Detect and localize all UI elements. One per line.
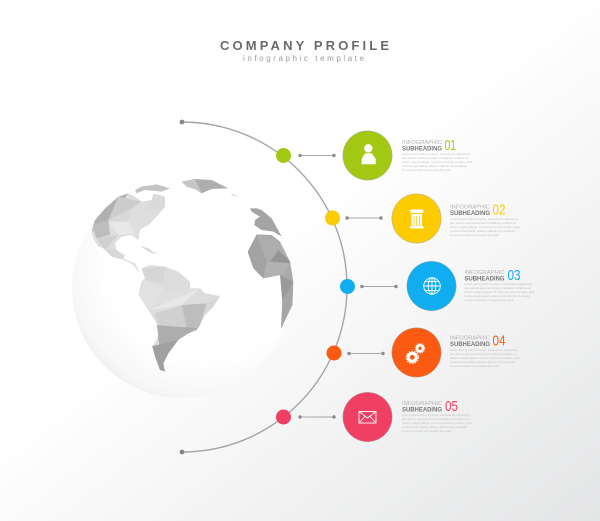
- number: 04: [492, 332, 506, 350]
- body text: [402, 413, 472, 433]
- body text: nostrud exercitation ullamco laboris nisi ut aliquip: [402, 425, 468, 429]
- item 2: SUBHEADING: [450, 211, 490, 217]
- circle: [392, 328, 441, 377]
- south america: [138, 265, 220, 372]
- arc end dots: [180, 120, 184, 454]
- circle: [343, 392, 392, 442]
- number: 01: [444, 137, 456, 154]
- number: 03: [508, 267, 520, 284]
- node dot: [340, 279, 355, 294]
- body text: ex ea commodo consequat duis aute: [450, 233, 499, 237]
- body text: nostrud exercitation ullamco laboris nisi ut aliquip: [450, 229, 516, 233]
- connector: [299, 416, 335, 418]
- body text: elit, sed do eiusmod tempor incididunt ut labore et: [402, 417, 468, 421]
- node dot: [326, 346, 342, 360]
- title: COMPANY PROFILE: [220, 38, 389, 53]
- north america: [90, 184, 170, 275]
- body text: dolore magna aliqua. Ut enim ad minim veniam, quis: [402, 160, 472, 164]
- body text: dolore magna aliqua. Ut enim ad minim veniam, quis: [464, 290, 535, 294]
- heading: INFOGRAPHIC: [402, 401, 442, 407]
- node dot: [276, 148, 291, 163]
- body text: [450, 348, 520, 368]
- body text: ex ea commodo consequat duis aute: [402, 429, 451, 433]
- item 5: [276, 392, 472, 442]
- small island: [230, 193, 238, 197]
- body text: [464, 282, 535, 302]
- body text: Lorem ipsum dolor sit amet, consectetur adipiscing: [450, 348, 518, 352]
- arc timeline: [182, 122, 347, 452]
- icon: person: [362, 144, 376, 164]
- greenland, europe, africa: [182, 179, 295, 332]
- node dot: [325, 210, 340, 226]
- number: 05: [445, 398, 458, 415]
- item 4: SUBHEADING: [450, 342, 490, 348]
- body text: ex ea commodo consequat duis aute: [464, 298, 514, 302]
- subtitle: infographic template: [243, 54, 365, 63]
- greenland: [182, 179, 228, 193]
- body text: nostrud exercitation ullamco laboris nisi ut aliquip: [464, 294, 530, 298]
- body text: elit, sed do eiusmod tempor incididunt ut labore et: [464, 286, 531, 290]
- body text: Lorem ipsum dolor sit amet, consectetur adipiscing: [464, 282, 532, 286]
- body text: ex ea commodo consequat duis aute: [402, 168, 451, 172]
- body text: Lorem ipsum dolor sit amet, consectetur adipiscing: [402, 413, 470, 417]
- body text: elit, sed do eiusmod tempor incididunt ut labore et: [450, 352, 516, 356]
- body text: dolore magna aliqua. Ut enim ad minim veniam, quis: [450, 225, 520, 229]
- arctic islands: [135, 184, 170, 193]
- number: 02: [492, 202, 506, 218]
- heading: INFOGRAPHIC: [450, 336, 490, 342]
- heading: INFOGRAPHIC: [402, 140, 442, 146]
- connector: [361, 285, 397, 288]
- item 3: [340, 261, 535, 311]
- body text: nostrud exercitation ullamco laboris nisi ut aliquip: [450, 360, 516, 364]
- heading: INFOGRAPHIC: [450, 204, 490, 210]
- circle: [392, 194, 441, 243]
- heading: INFOGRAPHIC: [464, 270, 504, 276]
- connector: [299, 154, 335, 157]
- connector: [346, 217, 382, 219]
- body text: dolore magna aliqua. Ut enim ad minim veniam, quis: [402, 421, 472, 425]
- body text: nostrud exercitation ullamco laboris nisi ut aliquip: [402, 164, 468, 168]
- europe: [250, 208, 282, 237]
- icon: globe: [424, 278, 440, 294]
- connector: [348, 352, 384, 355]
- body text: ex ea commodo consequat duis aute: [450, 364, 499, 368]
- body text: [450, 217, 520, 237]
- icon: gears: [406, 344, 425, 363]
- item 4: [326, 328, 520, 377]
- globe: [72, 178, 295, 398]
- circle: [407, 261, 456, 311]
- node dot: [276, 410, 291, 424]
- circle: [343, 131, 392, 180]
- body text: elit, sed do eiusmod tempor incididunt ut labore et: [450, 221, 516, 225]
- item 5: SUBHEADING: [402, 407, 442, 413]
- body text: elit, sed do eiusmod tempor incididunt ut labore et: [402, 156, 468, 160]
- body text: dolore magna aliqua. Ut enim ad minim veniam, quis: [450, 356, 520, 360]
- item 1: SUBHEADING: [402, 146, 442, 152]
- item 1: [276, 131, 472, 180]
- icon: envelope: [359, 412, 376, 423]
- body text: [402, 152, 472, 172]
- body text: Lorem ipsum dolor sit amet, consectetur adipiscing: [450, 217, 518, 221]
- africa: [248, 234, 294, 329]
- icon: column: [410, 210, 424, 228]
- body text: Lorem ipsum dolor sit amet, consectetur adipiscing: [402, 152, 470, 156]
- caribbean islands: [140, 246, 159, 254]
- item 3: SUBHEADING: [464, 276, 505, 282]
- item 2: [325, 194, 520, 243]
